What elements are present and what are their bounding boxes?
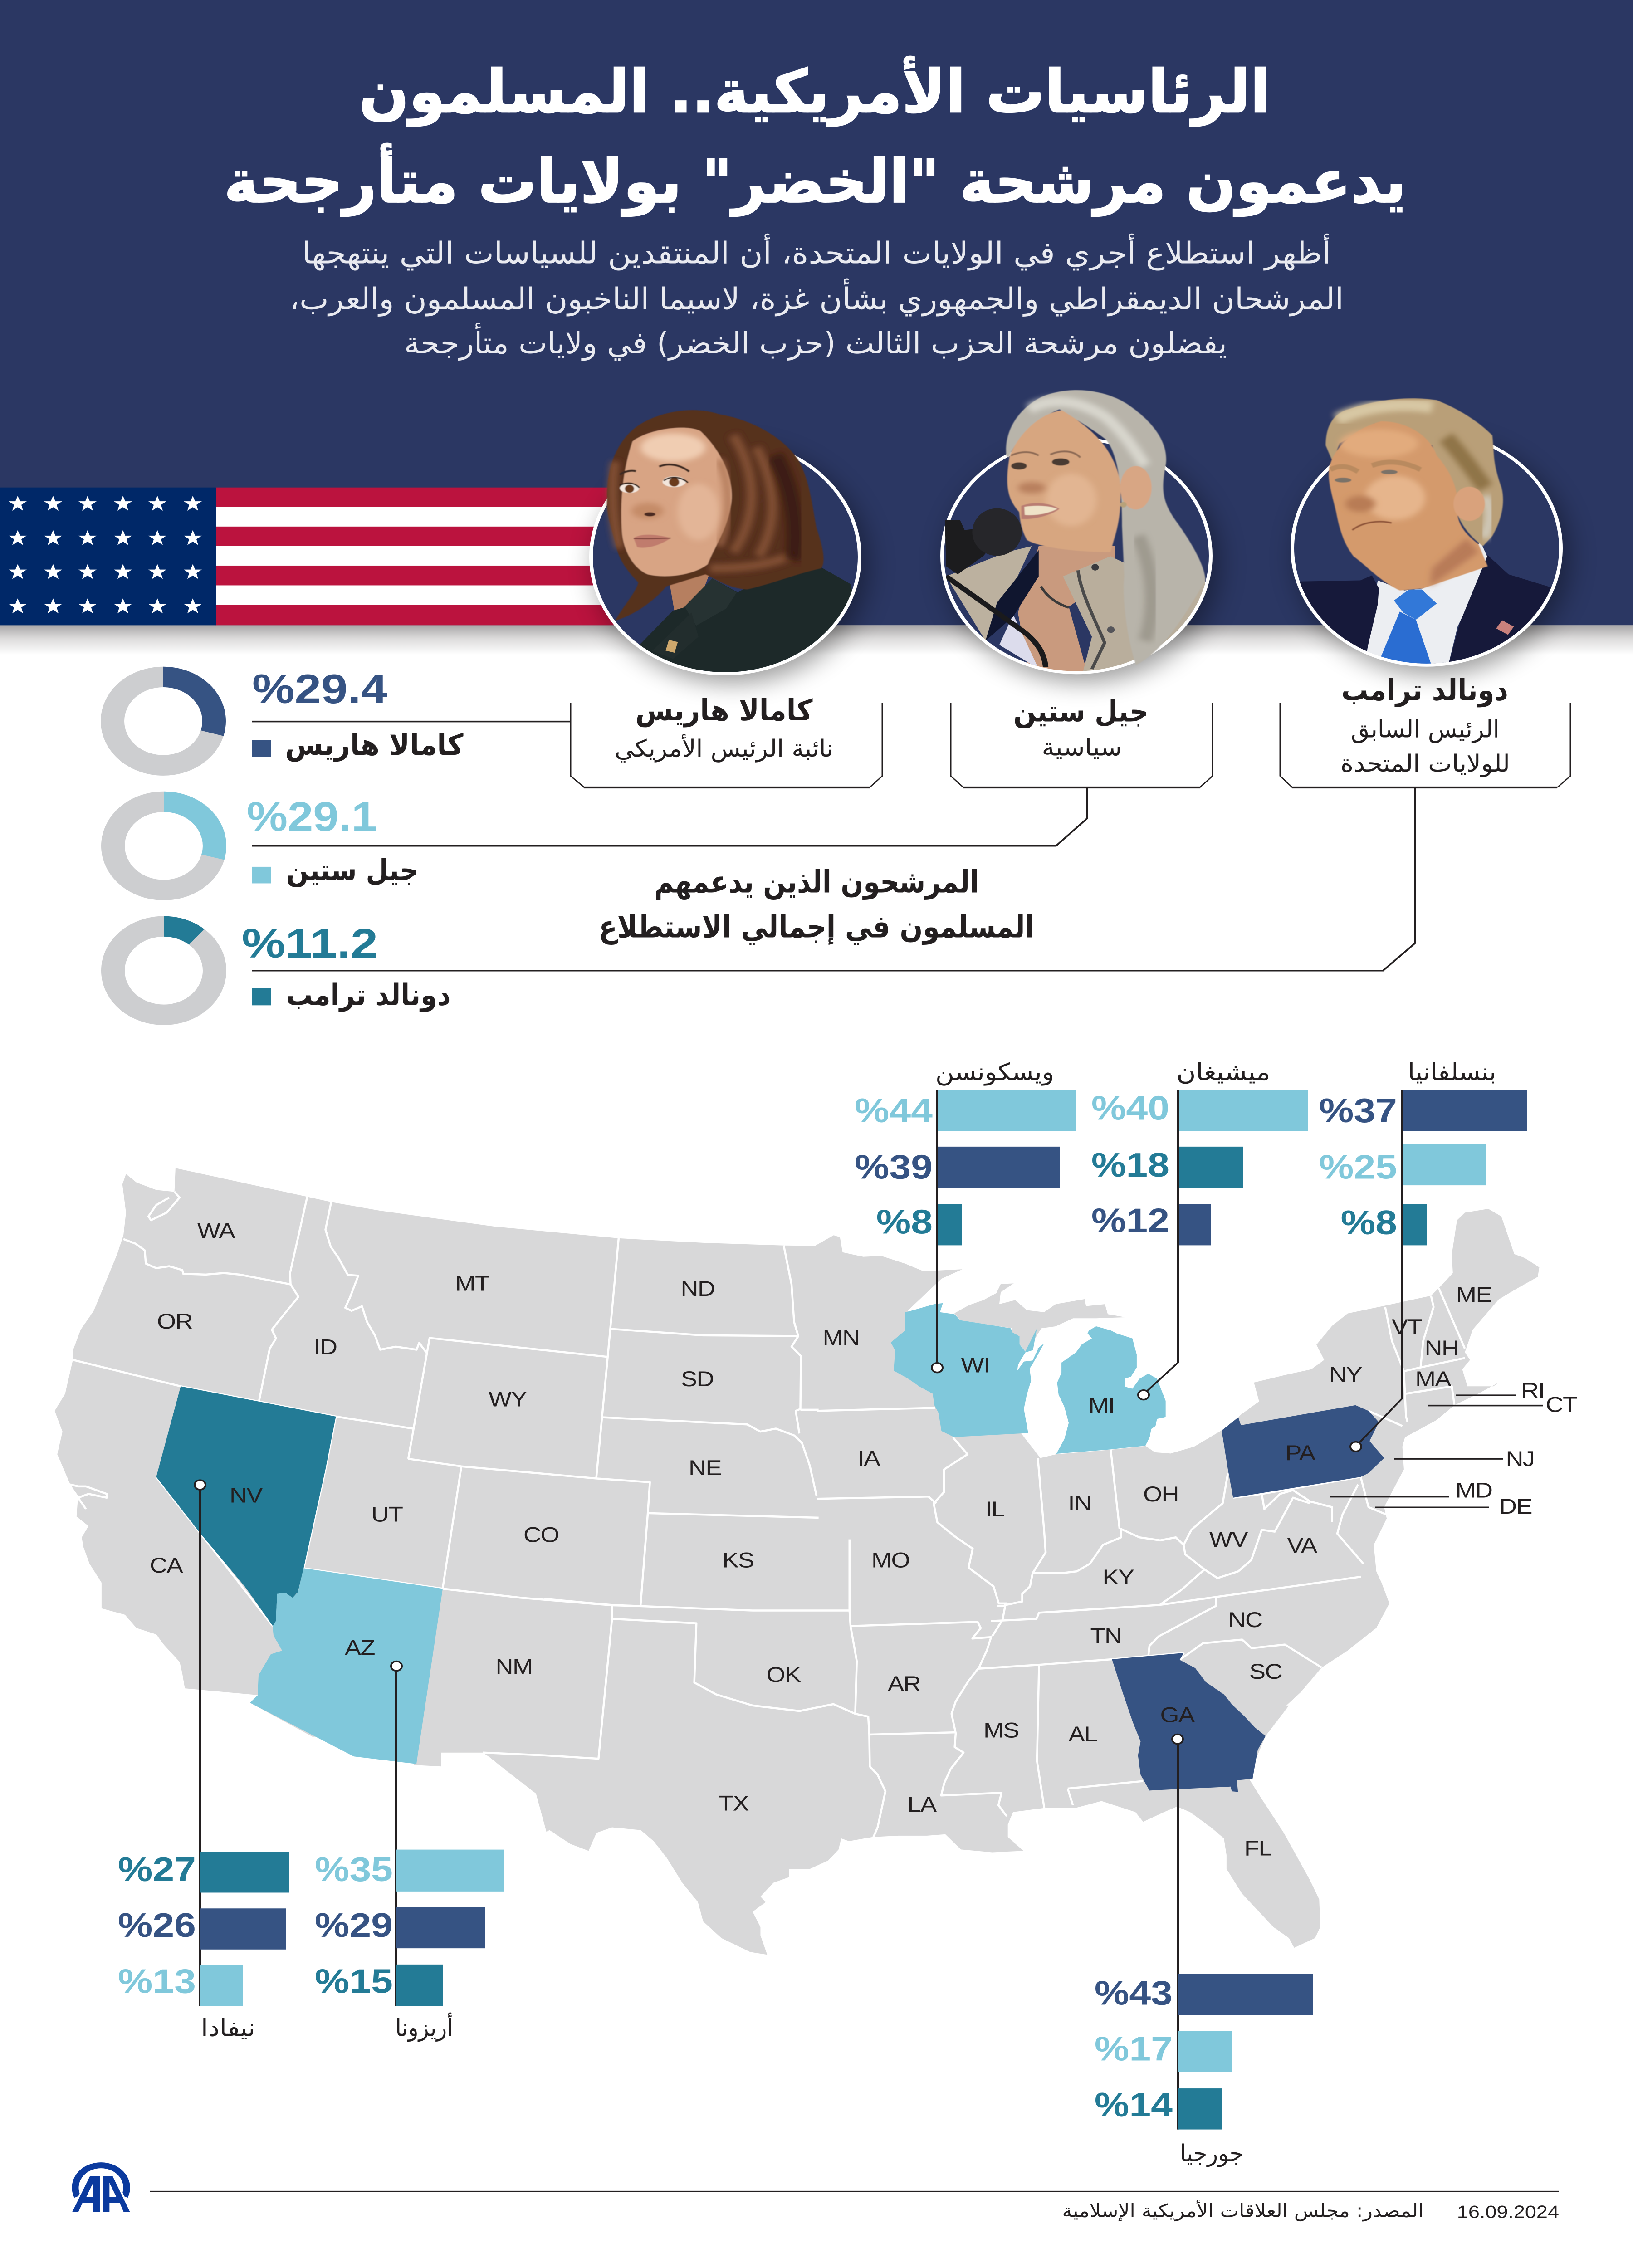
state labels: CT xyxy=(1546,1393,1577,1417)
candidate card: Trump: دونالد ترامب xyxy=(1341,674,1508,707)
state labels: SD xyxy=(681,1367,714,1391)
bar group: Arizona: %35 xyxy=(315,1851,393,1889)
state: Pennsylvania xyxy=(1222,1405,1384,1498)
bar group: Michigan: ميشيغان xyxy=(1177,1058,1271,1086)
footer rule xyxy=(150,2191,1559,2192)
bar group: Nevada: %27 xyxy=(118,1851,196,1889)
central caption: المرشحون الذين يدعمهم xyxy=(654,864,979,900)
intro text block: يفضلون مرشحة الحزب الثالث (حزب الخضر) في ولايات متأرجحة xyxy=(404,323,1227,361)
state borders: south xyxy=(483,1540,1361,1837)
state labels: OH xyxy=(1143,1482,1178,1506)
legend: Stein: جيل ستين xyxy=(286,854,419,887)
state labels: AZ xyxy=(345,1636,375,1660)
state borders: west xyxy=(70,1192,819,1626)
state labels: NE xyxy=(689,1456,721,1480)
donut chart: Harris 29.4 xyxy=(112,666,387,765)
state labels: WI xyxy=(961,1353,989,1377)
state labels: DE xyxy=(1499,1494,1532,1518)
bar group: Wisconsin: %44 xyxy=(855,1092,933,1130)
bar group: Georgia xyxy=(1095,1735,1313,2167)
state labels: MT xyxy=(455,1271,489,1295)
central caption: المسلمون في إجمالي الاستطلاع xyxy=(599,909,1034,945)
state labels: MD xyxy=(1456,1478,1492,1502)
state labels: CO xyxy=(523,1523,559,1547)
US map xyxy=(55,1168,1577,1955)
bar group: Pennsylvania: بنسلفانيا xyxy=(1408,1058,1496,1086)
title: يدعمون مرشحة "الخضر" بولايات متأرجحة xyxy=(224,143,1406,217)
legend: Harris: كامالا هاريس xyxy=(285,728,464,762)
land: upper peninsula of Michigan xyxy=(943,1283,1125,1353)
bar group: Pennsylvania xyxy=(1319,1058,1527,1452)
state labels: WV xyxy=(1209,1527,1248,1551)
land: east xyxy=(815,1209,1539,1737)
icon: US flag xyxy=(0,488,624,625)
bar group: Arizona: %29 xyxy=(315,1906,393,1945)
candidate card: Harris: كامالا هاريس xyxy=(635,694,813,728)
state labels: LA xyxy=(907,1792,937,1816)
state labels: ID xyxy=(313,1335,337,1359)
state labels: OK xyxy=(766,1662,801,1686)
state labels: FL xyxy=(1244,1836,1271,1860)
state labels: MO xyxy=(871,1548,909,1572)
state: Wisconsin xyxy=(891,1303,1044,1437)
candidate card: Stein: جيل ستين xyxy=(1013,695,1149,728)
state labels: MN xyxy=(823,1326,859,1350)
bar group: Wisconsin: ويسكونسن xyxy=(935,1058,1054,1086)
state labels: RI xyxy=(1521,1378,1545,1402)
bar group: Nevada xyxy=(118,1480,289,2042)
bar group: Nevada: %26 xyxy=(118,1906,196,1945)
state labels: IL xyxy=(985,1497,1004,1521)
title: الرئاسيات الأمريكية.. المسلمون xyxy=(359,56,1270,127)
intro text block: المرشحان الديمقراطي والجمهوري بشأن غزة، لاسيما الناخبون المسلمون والعرب، xyxy=(289,279,1344,317)
small-state leader lines xyxy=(1330,1395,1543,1507)
state labels: NY xyxy=(1329,1363,1362,1387)
bar group: Michigan xyxy=(1091,1058,1308,1400)
bar group: Pennsylvania: %25 xyxy=(1319,1148,1397,1186)
state labels: UT xyxy=(372,1502,403,1526)
state labels: GA xyxy=(1160,1703,1195,1727)
candidate card: Harris: نائبة الرئيس الأمريكي xyxy=(615,734,833,763)
state labels: AR xyxy=(888,1672,920,1696)
state labels: MA xyxy=(1415,1367,1452,1391)
land: south xyxy=(414,1706,1320,1955)
state labels: WY xyxy=(489,1387,527,1411)
bar group: Arizona: %15 xyxy=(315,1963,393,2000)
portrait: Trump xyxy=(1284,398,1569,675)
state labels: NV xyxy=(230,1483,263,1507)
state: Nevada xyxy=(156,1386,336,1626)
central caption xyxy=(599,864,1034,945)
state: Michigan xyxy=(1056,1326,1166,1454)
bar group: Pennsylvania: %37 xyxy=(1319,1092,1397,1130)
state labels: ND xyxy=(681,1276,714,1300)
state labels: ME xyxy=(1456,1282,1491,1306)
state labels: VA xyxy=(1287,1534,1317,1557)
legend: Stein xyxy=(252,854,419,887)
bar group: Wisconsin xyxy=(855,1058,1076,1373)
candidate card: Trump: الرئيس السابق xyxy=(1351,716,1500,743)
state labels: NJ xyxy=(1506,1447,1534,1471)
candidate card: Stein: سياسية xyxy=(1042,734,1122,762)
donut chart: Trump 11.2 xyxy=(113,920,378,1015)
source text: المصدر: مجلس العلاقات الأمريكية الإسلامية xyxy=(1062,2200,1423,2222)
title xyxy=(224,56,1406,217)
bar group: Georgia: %43 xyxy=(1095,1975,1173,2012)
bar group: Arizona xyxy=(315,1662,504,2042)
state labels: CA xyxy=(150,1553,183,1577)
state labels: NH xyxy=(1425,1336,1458,1360)
land: west xyxy=(55,1168,819,1737)
state labels: MS xyxy=(983,1718,1019,1742)
bar group: Wisconsin: %8 xyxy=(876,1203,933,1241)
candidate card: Trump: للولايات المتحدة xyxy=(1340,750,1510,777)
icon: AA logo xyxy=(71,2165,132,2213)
header background panel xyxy=(0,0,1633,625)
state labels: MI xyxy=(1089,1393,1114,1418)
state borders: east xyxy=(816,1288,1465,1605)
header drop shadow xyxy=(0,625,1633,655)
state labels: TN xyxy=(1090,1624,1121,1648)
candidate card: Stein xyxy=(951,695,1213,787)
bar group: Michigan: %12 xyxy=(1091,1202,1169,1240)
bar group: Georgia: %17 xyxy=(1095,2030,1173,2068)
state labels: SC xyxy=(1249,1659,1282,1683)
state labels: NM xyxy=(496,1655,532,1679)
bar group: Nevada: %13 xyxy=(118,1963,196,2000)
state labels: OR xyxy=(157,1309,192,1333)
state labels: KY xyxy=(1102,1565,1134,1589)
bar group: Nevada: نيفادا xyxy=(201,2014,255,2042)
state labels: IA xyxy=(858,1446,880,1470)
state labels: KS xyxy=(722,1548,754,1572)
portrait: Stein xyxy=(942,390,1219,683)
intro text block xyxy=(289,233,1344,361)
legend: Trump xyxy=(252,978,451,1012)
state labels xyxy=(150,1218,1577,1860)
candidate card: Trump xyxy=(1280,674,1570,787)
intro text block: أظهر استطلاع أجري في الولايات المتحدة، أن المنتقدين للسياسات التي ينتهجها xyxy=(302,233,1331,271)
state labels: NC xyxy=(1228,1608,1262,1632)
state labels: IN xyxy=(1068,1491,1091,1515)
bar group: Michigan: %40 xyxy=(1091,1090,1169,1127)
donut chart: Harris 29.4: %29.4 xyxy=(252,666,387,712)
bar group: Michigan: %18 xyxy=(1091,1146,1169,1184)
bar group: Arizona: أريزونا xyxy=(396,2012,453,2042)
bar group: Georgia: %14 xyxy=(1095,2086,1173,2124)
candidate card: Harris xyxy=(571,694,882,787)
state labels: AL xyxy=(1068,1722,1097,1746)
portrait: Harris xyxy=(591,410,868,684)
date: 16.09.2024 xyxy=(1457,2202,1559,2222)
bar group: Pennsylvania: %8 xyxy=(1341,1204,1397,1242)
donut chart: Stein 29.1 xyxy=(113,794,377,890)
state labels: PA xyxy=(1285,1441,1315,1465)
state labels: WA xyxy=(197,1218,235,1242)
state: Georgia xyxy=(1112,1653,1266,1792)
donut chart: Trump 11.2: %11.2 xyxy=(242,920,378,967)
bar group: Wisconsin: %39 xyxy=(855,1148,933,1186)
state: Arizona xyxy=(250,1568,443,1764)
state labels: VT xyxy=(1392,1315,1422,1339)
legend: Trump: دونالد ترامب xyxy=(286,978,451,1012)
donut chart: Stein 29.1: %29.1 xyxy=(247,794,377,840)
bar group: Georgia: جورجيا xyxy=(1180,2140,1243,2167)
state labels: TX xyxy=(719,1791,749,1815)
connector lines xyxy=(252,722,1415,971)
